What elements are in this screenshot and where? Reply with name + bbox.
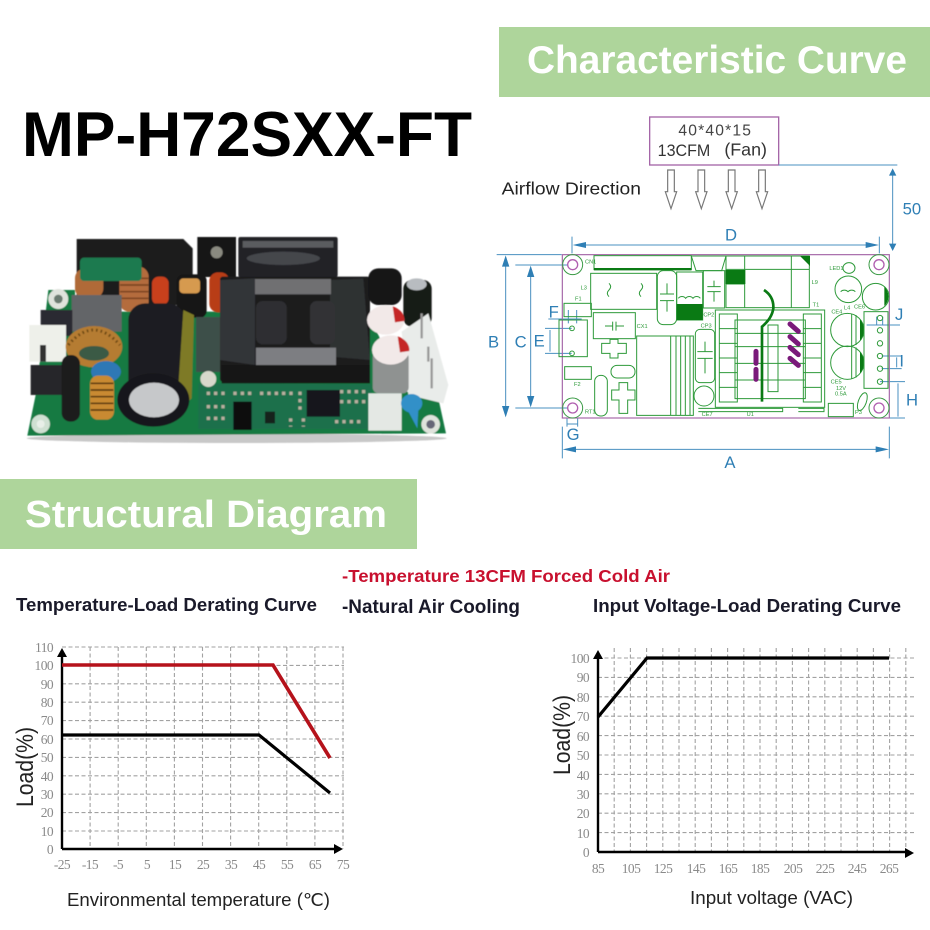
x axis labels: 15 (169, 857, 182, 872)
silkscreen labels: T1 (813, 303, 819, 309)
x axis labels: 225 (816, 861, 835, 876)
silkscreen labels: L4 (844, 305, 850, 311)
silkscreen labels: 12V (836, 386, 846, 392)
y axis labels: 30 (577, 787, 590, 802)
x axis labels: 245 (848, 861, 867, 876)
y axis title: Load(%) (549, 695, 576, 775)
mounting holes (563, 255, 889, 418)
mechanical schematic (488, 117, 921, 472)
dimension D: D (725, 225, 737, 244)
silkscreen labels: CE7 (702, 412, 713, 418)
dimension J: J (895, 305, 903, 324)
grid lines (62, 647, 344, 849)
x axis labels: -15 (82, 857, 99, 872)
dimension I: I (899, 352, 904, 371)
board (27, 290, 446, 436)
dimension H: H (906, 390, 918, 409)
dimension I (882, 352, 904, 371)
y axis labels: 0 (47, 842, 54, 857)
silkscreen labels: L3 (581, 285, 587, 291)
dimension D (572, 225, 879, 253)
silkscreen labels: CP2 (703, 313, 714, 319)
chart title: input voltage-load: Input Voltage-Load Derating Curve (593, 596, 901, 616)
y axis labels: 10 (577, 826, 590, 841)
silkscreen labels: CE5 (831, 379, 842, 385)
y axis labels (35, 640, 54, 857)
grid lines (598, 648, 915, 852)
x axis title: Environmental temperature (℃) (67, 890, 330, 910)
silkscreen labels: RT1 (585, 409, 596, 415)
dimension 50 (779, 165, 921, 251)
dimension C: C (515, 332, 527, 351)
axes (593, 650, 914, 858)
x axis labels: 205 (784, 861, 803, 876)
product photo: power supply board (27, 237, 448, 443)
y axis labels: 0 (583, 845, 590, 860)
y axis labels: 80 (41, 695, 54, 710)
dimension E (534, 328, 572, 353)
y axis title: Load(%) (12, 727, 39, 807)
fan box (650, 117, 779, 165)
silkscreen labels: F1 (575, 297, 582, 303)
dimension 50: 50 (903, 199, 921, 218)
heading banner: Characteristic Curve (499, 27, 930, 97)
dimension J (867, 305, 903, 325)
y axis labels: 70 (577, 709, 590, 724)
heading banner: Structural Diagram: Structural Diagram (25, 494, 387, 536)
silkscreen labels: CX1 (637, 324, 648, 330)
dimension A: A (724, 453, 736, 472)
airflow direction label: Airflow Direction (502, 179, 641, 199)
silkscreen labels: F2 (574, 382, 581, 388)
silkscreen labels: P3 (855, 410, 862, 416)
x axis labels: -25 (54, 857, 71, 872)
line chart: input voltage-load derating (549, 648, 915, 908)
x axis labels: 45 (253, 857, 266, 872)
chart title: temperature-load: Temperature-Load Derating Curve (16, 595, 317, 615)
silkscreen labels: CN1 (585, 259, 596, 265)
y axis labels (571, 651, 590, 860)
x axis labels: 55 (281, 857, 294, 872)
legend: forced cold air: -Temperature 13CFM Forced Cold Air (342, 566, 670, 586)
y axis labels: 40 (577, 768, 590, 783)
y axis labels: 10 (41, 824, 54, 839)
x axis labels: 265 (880, 861, 899, 876)
dimension F (548, 302, 582, 323)
y axis labels: 40 (41, 769, 54, 784)
y axis labels: 70 (41, 713, 54, 728)
fan box: (Fan) (724, 139, 767, 159)
x axis labels: 35 (225, 857, 238, 872)
circuit board outline (559, 255, 889, 418)
y axis labels: 100 (571, 651, 590, 666)
load curve (598, 658, 889, 717)
silkscreen labels (574, 259, 865, 418)
y axis labels: 20 (577, 806, 590, 821)
y axis labels: 90 (577, 670, 590, 685)
y axis labels: 100 (35, 658, 54, 673)
x axis labels (54, 857, 350, 872)
control module (198, 383, 372, 429)
y axis labels: 60 (577, 729, 590, 744)
x axis labels: 185 (751, 861, 770, 876)
forced air curve (62, 665, 330, 758)
y axis labels: 30 (41, 787, 54, 802)
y axis labels: 90 (41, 677, 54, 692)
airflow arrows (665, 170, 768, 209)
x axis labels: 5 (144, 857, 151, 872)
y axis labels: 50 (41, 750, 54, 765)
y axis labels: 80 (577, 690, 590, 705)
dimension A (562, 427, 889, 472)
x axis labels: 145 (687, 861, 706, 876)
silkscreen labels: L9 (812, 280, 818, 286)
dimension E: E (534, 332, 545, 351)
silkscreen labels: CE6 (854, 305, 865, 311)
x axis labels: 125 (654, 861, 673, 876)
dimension F: F (549, 302, 559, 321)
y axis labels: 110 (35, 640, 54, 655)
silkscreen labels: CE4 (831, 309, 842, 315)
dimension B: B (488, 332, 499, 351)
x axis labels: 25 (197, 857, 210, 872)
y axis labels: 50 (577, 748, 590, 763)
heading banner: Characteristic Curve: Characteristic Curve (527, 39, 907, 82)
silkscreen labels: CP3 (701, 323, 712, 329)
y axis labels: 20 (41, 805, 54, 820)
x axis labels (592, 861, 899, 876)
y axis labels: 60 (41, 732, 54, 747)
silkscreen labels: 0.5A (835, 391, 847, 397)
dimension C (515, 265, 567, 408)
dimension B (488, 255, 562, 417)
x axis labels: 65 (309, 857, 322, 872)
x axis title: Input voltage (VAC) (690, 888, 853, 908)
silkscreen labels: LED1 (829, 266, 843, 272)
dimension H (827, 382, 918, 418)
fan box: 40*40*15 (678, 122, 751, 139)
line chart: temperature-load derating (12, 640, 350, 910)
component footprints (559, 256, 889, 417)
legend: natural air cooling: -Natural Air Cooling (342, 597, 520, 618)
x axis labels: 165 (719, 861, 738, 876)
axes (57, 648, 343, 854)
natural cooling curve (62, 735, 330, 793)
heading banner: Structural Diagram (0, 479, 417, 549)
fan box: 13CFM (658, 141, 710, 160)
x axis labels: -5 (113, 857, 124, 872)
dimension G: G (567, 425, 580, 444)
x axis labels: 85 (592, 861, 605, 876)
x axis labels: 75 (337, 857, 350, 872)
x axis labels: 105 (622, 861, 641, 876)
silkscreen labels: U1 (747, 412, 754, 418)
title: MP-H72SXX-FT (22, 100, 472, 170)
